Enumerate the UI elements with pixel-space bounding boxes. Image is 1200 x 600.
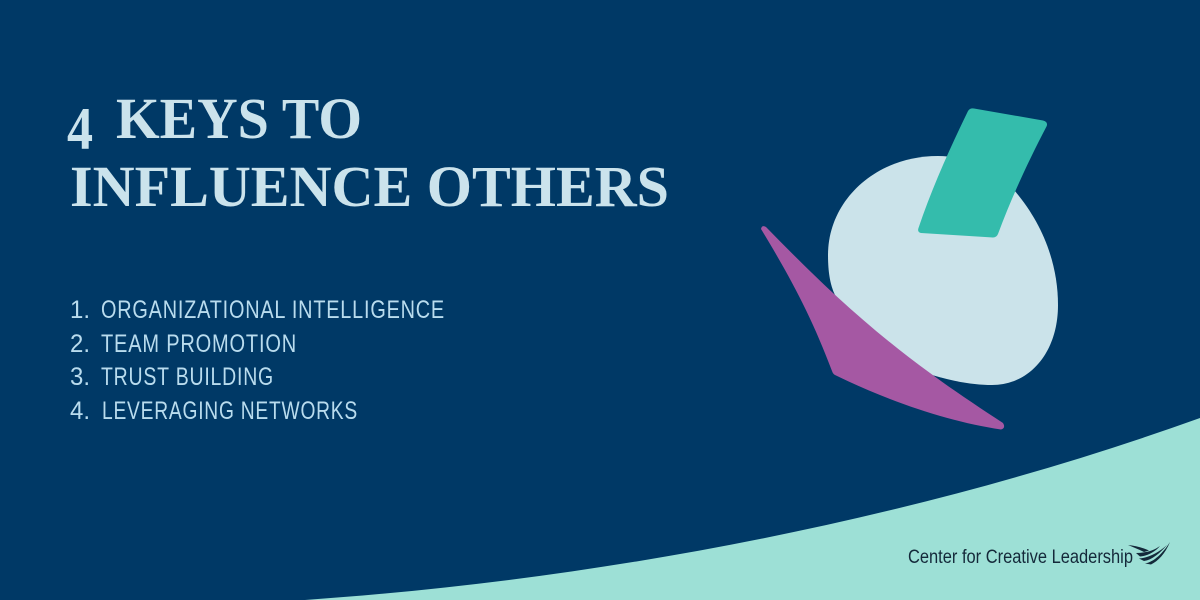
list item 3: 3. — [70, 363, 90, 391]
logo: Center for Creative Leadership — [908, 542, 1170, 568]
light blue blob — [828, 156, 1058, 385]
logo swoosh icon — [1128, 542, 1170, 564]
abstract shapes illustration — [761, 108, 1058, 430]
title: 4 — [67, 96, 93, 162]
list item 2: 2. — [70, 330, 90, 358]
mint curved band — [305, 418, 1200, 600]
list item 3 — [70, 363, 274, 391]
list item 4: 4. — [70, 397, 90, 425]
list item 1: 1. — [70, 296, 90, 324]
list item 4: LEVERAGING NETWORKS — [102, 397, 358, 425]
title: INFLUENCE OTHERS — [70, 154, 669, 219]
title — [67, 86, 669, 219]
list item 3: TRUST BUILDING — [101, 363, 274, 391]
teal card — [918, 108, 1047, 238]
title: KEYS TO — [116, 86, 362, 151]
logo wordmark: Center for Creative Leadership — [908, 547, 1133, 568]
numbered list — [70, 296, 445, 425]
purple shard — [761, 226, 1004, 430]
list item 1: ORGANIZATIONAL INTELLIGENCE — [101, 296, 445, 324]
list item 2: TEAM PROMOTION — [101, 330, 297, 358]
